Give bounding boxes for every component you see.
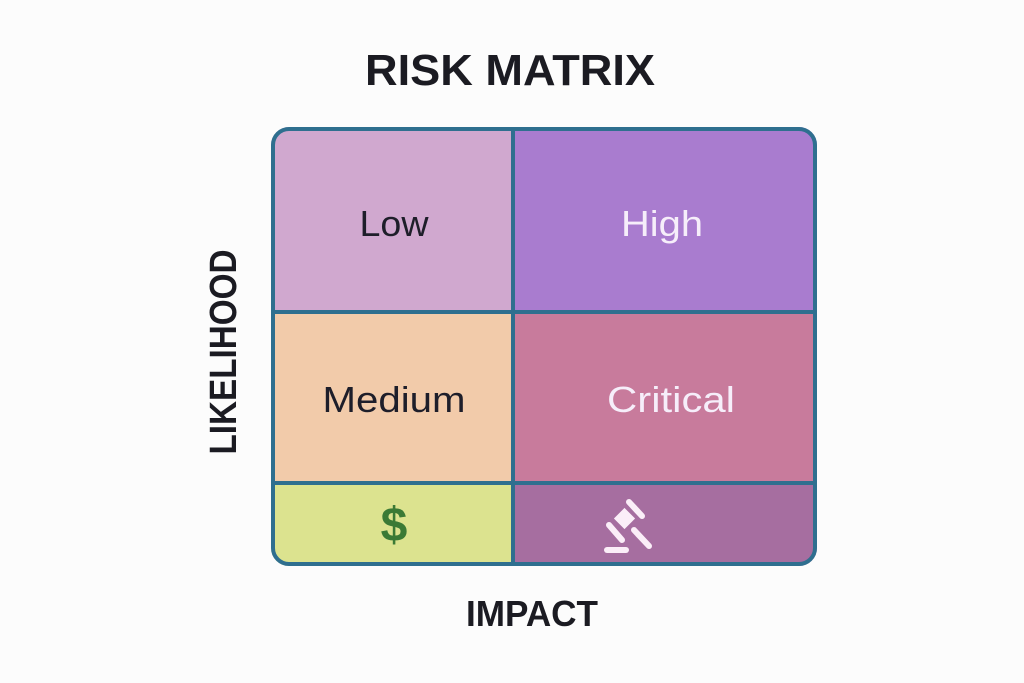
icon: gavel: [607, 502, 649, 550]
label: medium: Medium: [322, 379, 466, 420]
cell: legal: [513, 483, 817, 566]
cell: high: [513, 127, 817, 312]
cell: critical: [513, 312, 817, 483]
matrix grid: [271, 127, 817, 566]
cell: medium: [271, 312, 513, 483]
label: low: Low: [360, 203, 430, 244]
title: RISK MATRIX: [365, 46, 655, 95]
icon: dollar: $: [381, 499, 408, 552]
label: high: High: [621, 203, 703, 244]
cell: financial: [271, 483, 513, 566]
x-axis label: IMPACT: [466, 593, 598, 634]
y-axis label: LIKELIHOOD: [203, 250, 245, 454]
label: critical: Critical: [607, 379, 735, 420]
cell: low: [271, 127, 513, 312]
